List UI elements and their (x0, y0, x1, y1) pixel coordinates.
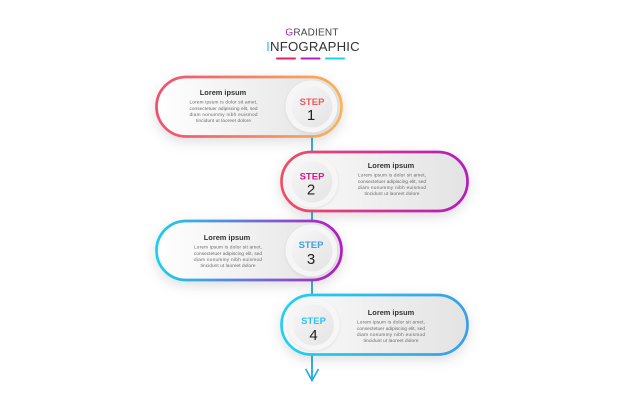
title accent bars (276, 58, 345, 60)
panel: step 4 (282, 295, 468, 354)
panel: step 2 (282, 152, 468, 211)
step 4 badge: 4 (309, 327, 318, 344)
step 1 badge: STEP (300, 97, 325, 108)
step 3 badge: STEP (299, 240, 324, 251)
step 2 text: Lorem ipsum (368, 161, 415, 170)
timeline arrow (306, 130, 318, 380)
step 3 text (194, 233, 262, 268)
title: GRADIENT (285, 28, 339, 38)
step 4 badge: STEP (301, 316, 327, 327)
step 1 text: consectetuer adipiscing elit, sed (190, 106, 258, 111)
step 2 text: consectetuer adipiscing elit, sed (358, 179, 426, 184)
step 1 text (190, 88, 258, 123)
step 2 badge: 2 (307, 182, 315, 198)
step 1 text: Lorem ipsum is dolor sit amet, (190, 100, 258, 104)
step 2 text: Lorem ipsum is dolor sit amet, (358, 172, 426, 178)
step 1 badge: 1 (307, 107, 315, 124)
step 4 text: Lorem ipsum (368, 308, 415, 317)
title (266, 28, 360, 54)
step 1 text: diam nonummy nibh euismod (190, 112, 258, 117)
step 3 text: tincidunt ut laoreet dolore (200, 263, 256, 268)
title: INFOGRAPHIC (266, 39, 360, 54)
step 3 text: consectetuer adipiscing elit, sed (194, 251, 262, 256)
step 2 badge (286, 156, 338, 208)
step 4 text: consectetuer adipiscing elit, sed (357, 326, 425, 331)
step 3 text: Lorem ipsum (204, 233, 251, 242)
step 4 text: tincidunt ut laoreet dolore (364, 338, 419, 343)
step 2 text (358, 161, 426, 196)
step 4 text: Lorem ipsum is dolor sit amet, (357, 320, 425, 324)
step 4 text (357, 308, 425, 343)
step 4 badge (288, 298, 340, 350)
panel: step 3 (156, 221, 342, 280)
panel: step 1 (156, 77, 342, 136)
step 2 text: tincidunt ut laoreet dolore (364, 191, 420, 196)
step 3 text: Lorem ipsum is dolor sit amet, (194, 244, 262, 250)
step 1 text: Lorem ipsum (200, 88, 247, 97)
step 3 badge: 3 (307, 251, 315, 268)
step 1 badge (286, 80, 338, 132)
step 3 badge (286, 224, 338, 276)
step 4 text: diam nonummy nibh euismod (357, 332, 425, 337)
step 2 badge: STEP (300, 172, 325, 182)
step 2 text: diam nonummy nibh euismod (358, 185, 426, 190)
step 1 text: tincidunt ut laoreet dolore (196, 118, 251, 123)
step 3 text: diam nonummy nibh euismod (194, 257, 262, 262)
